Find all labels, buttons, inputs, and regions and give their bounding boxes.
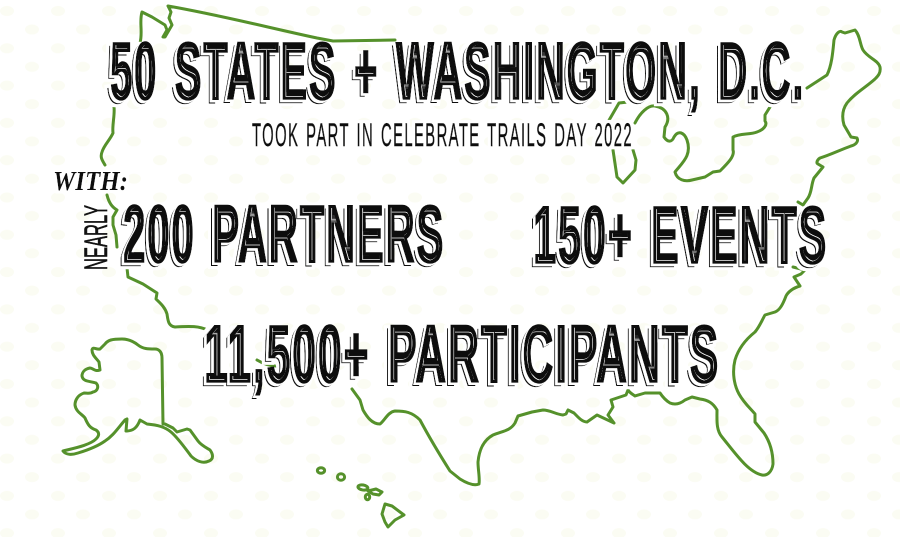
map: Hawaii	[317, 468, 404, 527]
map: Alaska	[63, 339, 212, 462]
label: with: WITH:	[53, 166, 128, 196]
text: 200 PARTNERS	[123, 189, 445, 280]
label: nearly: NEARLY	[78, 205, 114, 270]
map: contiguous states	[101, 6, 880, 485]
